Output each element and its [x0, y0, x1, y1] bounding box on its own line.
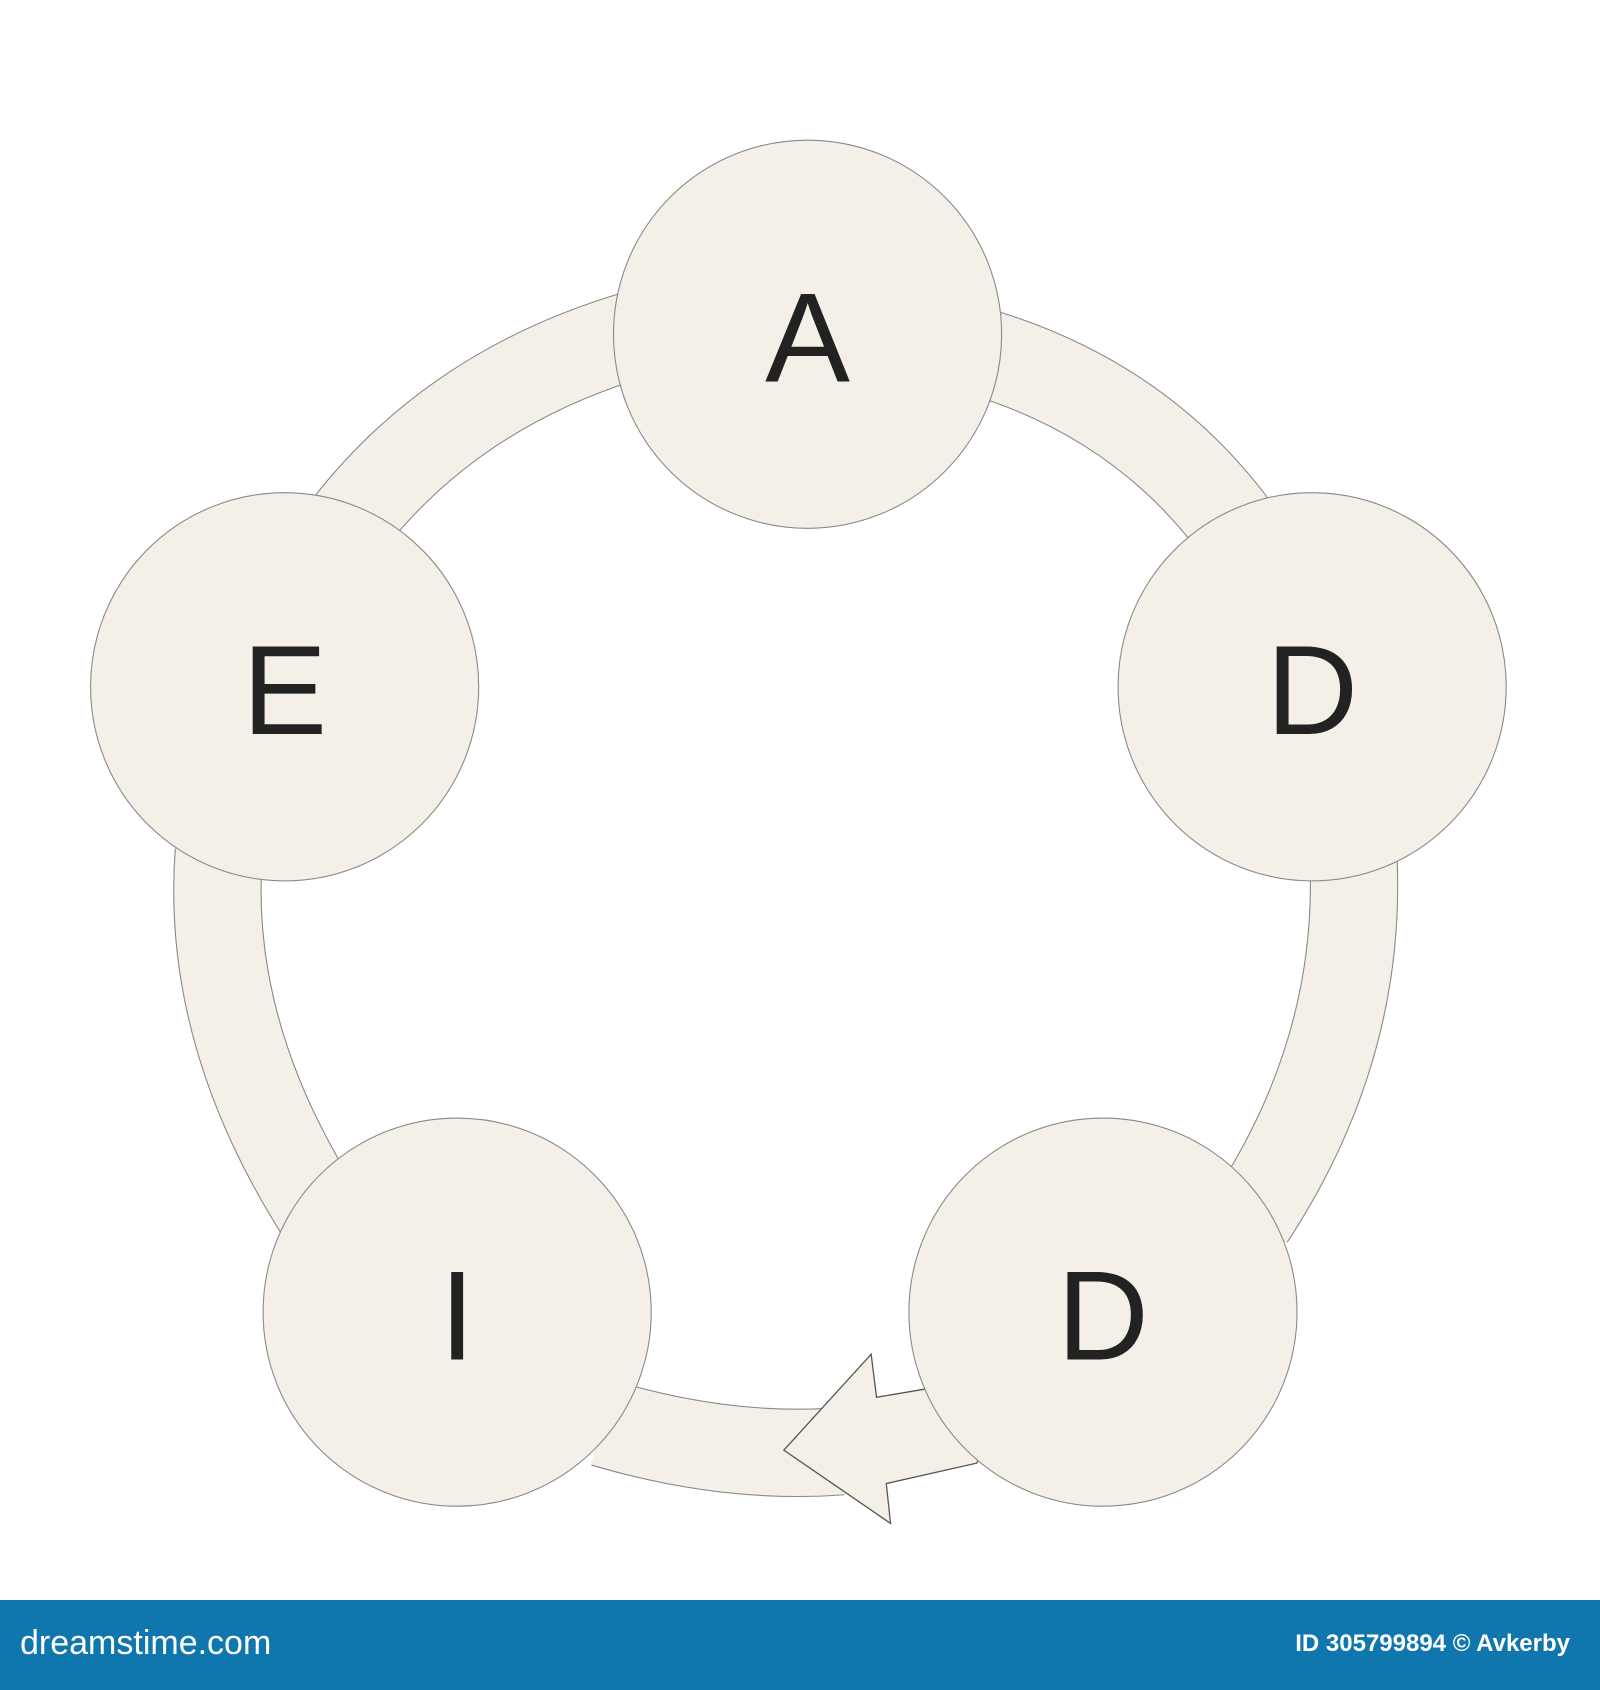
node A: A [765, 267, 850, 409]
footer id: ID 305799894 © Avkerby [1295, 1630, 1570, 1657]
arrow head [784, 1354, 1003, 1523]
node A [613, 140, 1002, 528]
ring [217, 334, 1354, 1453]
footer logo: dreamstime.com [20, 1624, 271, 1662]
node E: E [242, 619, 327, 761]
node D right [1118, 493, 1506, 881]
node I: I [439, 1245, 475, 1387]
footer bar [0, 1600, 1600, 1690]
node I [263, 1118, 651, 1506]
node D bottom: D [1057, 1245, 1149, 1387]
node D bottom [909, 1118, 1297, 1506]
node E [91, 493, 479, 881]
node D right: D [1266, 619, 1358, 761]
